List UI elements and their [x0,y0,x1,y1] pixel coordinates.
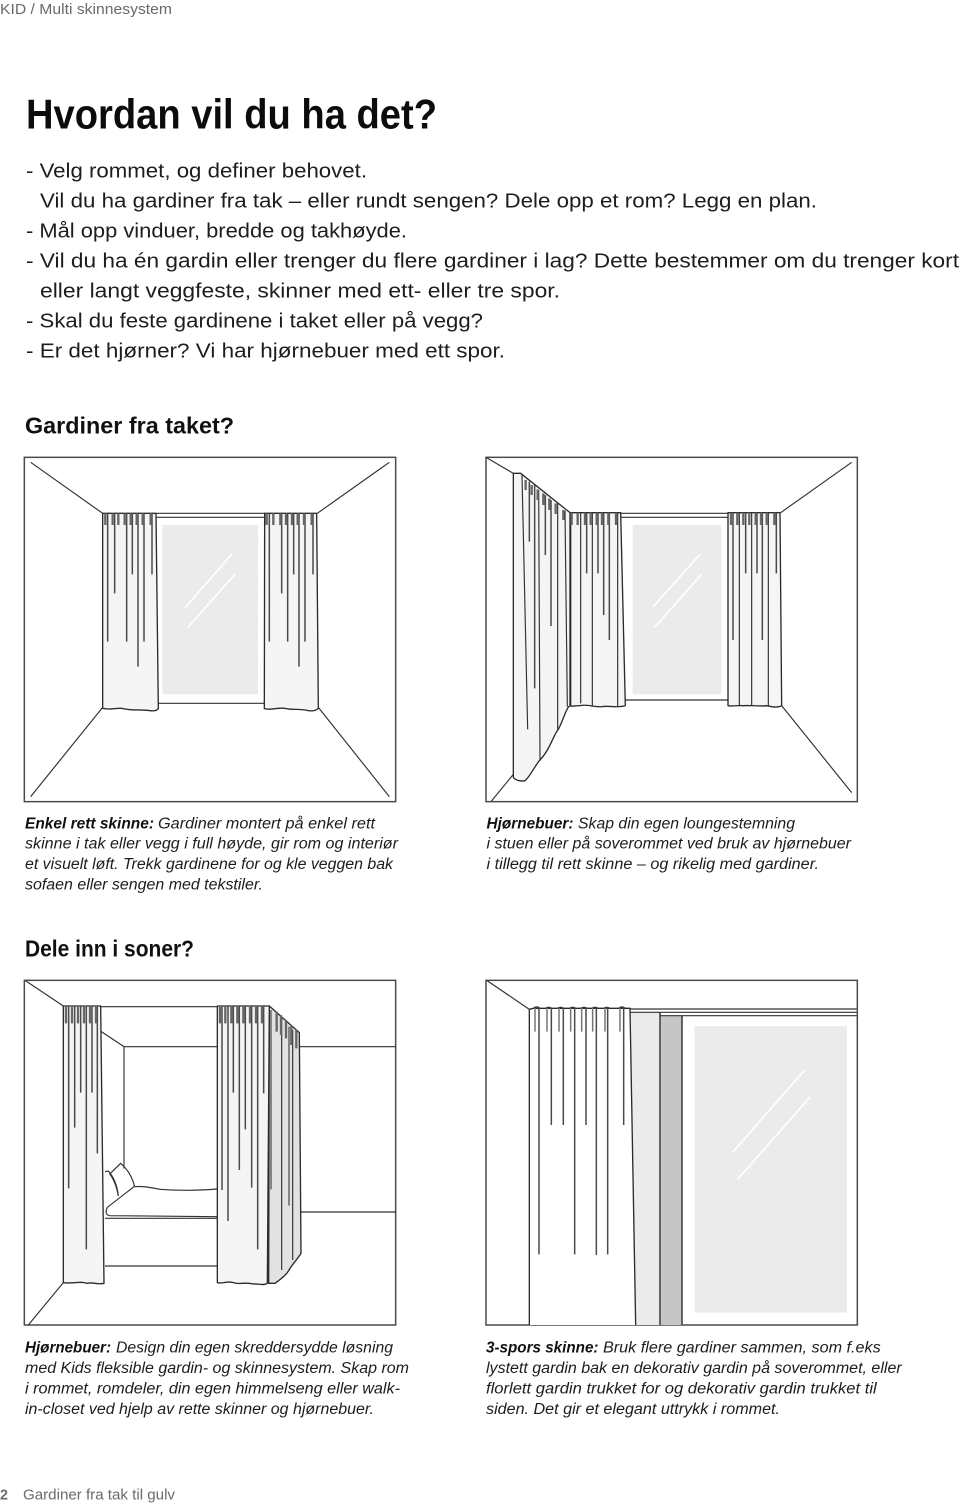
page footer: 2 [0,1486,8,1503]
caption: triple track rail [486,1340,903,1418]
caption: room division: Design din egen skreddersydde løsning [116,1340,393,1357]
caption: straight rail [25,815,399,894]
intro text block: - Er det hjørner? Vi har hjørnebuer med ett spor. [26,340,505,362]
intro text block: - Skal du feste gardinene i taket eller på vegg? [26,310,483,332]
panel: corner rail room illustration [486,457,857,802]
page footer: Gardiner fra tak til gulv [23,1486,175,1503]
panel: straight rail room illustration [24,457,396,802]
intro text block: - Vil du ha én gardin eller trenger du flere gardiner i lag? Dette bestemmer om du trenger kort [26,250,959,272]
heading: Dele inn i soner: Dele inn i soner? [25,936,194,962]
caption: corner rail: i tillegg til rett skinne – og rikelig med gardiner. [486,856,819,873]
caption: room division: in-closet ved hjelp av rette skinner og hjørnebuer. [25,1401,374,1418]
panel: triple track rail illustration [486,980,857,1325]
caption: straight rail: skinne i tak eller vegg i full høyde, gir rom og interiør [25,836,399,853]
caption: triple track rail: Bruk flere gardiner sammen, som f.eks [603,1340,881,1357]
caption: straight rail: sofaen eller sengen med tekstiler. [25,876,263,894]
caption: triple track rail: siden. Det gir et elegant uttrykk i rommet. [486,1401,780,1418]
intro text block: - Mål opp vinduer, bredde og takhøyde. [26,220,407,242]
caption: corner rail [486,815,852,873]
back curtain layer [631,1012,660,1325]
caption: corner rail: Skap din egen loungestemning [578,815,795,832]
page header: KID / Multi skinnesystem [0,1,172,18]
front curtain [529,1008,636,1325]
intro text block [26,160,959,362]
caption: room division [25,1340,409,1418]
caption: triple track rail: lystett gardin bak en dekorativ gardin på soverommet, eller [486,1360,903,1377]
caption: triple track rail: florlett gardin trukket for og dekorativ gardin trukket til [486,1381,877,1398]
caption: straight rail: et visuelt løft. Trekk gardinene for og kle veggen bak [25,856,394,873]
title: Hvordan vil du ha det? [26,90,437,137]
intro text block: - Velg rommet, og definer behovet. [26,160,367,182]
bed and pillows [105,1163,217,1217]
caption: room division: Hjørnebuer: [25,1340,111,1357]
caption: straight rail: Enkel rett skinne: [25,815,154,832]
intro text block: Vil du ha gardiner fra tak – eller rundt sengen? Dele opp et rom? Legg en plan. [40,190,817,212]
caption: triple track rail: 3-spors skinne: [486,1340,598,1357]
caption: straight rail: Gardiner montert på enkel rett [158,815,376,832]
panel: room division with bed illustration [24,980,396,1325]
caption: corner rail: i stuen eller på soverommet ved bruk av hjørnebuer [486,836,852,853]
intro text block: eller langt veggfeste, skinner med ett- eller tre spor. [40,280,560,302]
caption: room division: med Kids fleksible gardin- og skinnesystem. Skap rom [25,1360,409,1377]
caption: corner rail: Hjørnebuer: [486,815,574,832]
heading: Gardiner fra taket: Gardiner fra taket? [25,412,234,438]
caption: room division: i rommet, romdeler, din egen himmelseng eller walk- [25,1381,400,1398]
middle curtain layer [661,1016,682,1325]
